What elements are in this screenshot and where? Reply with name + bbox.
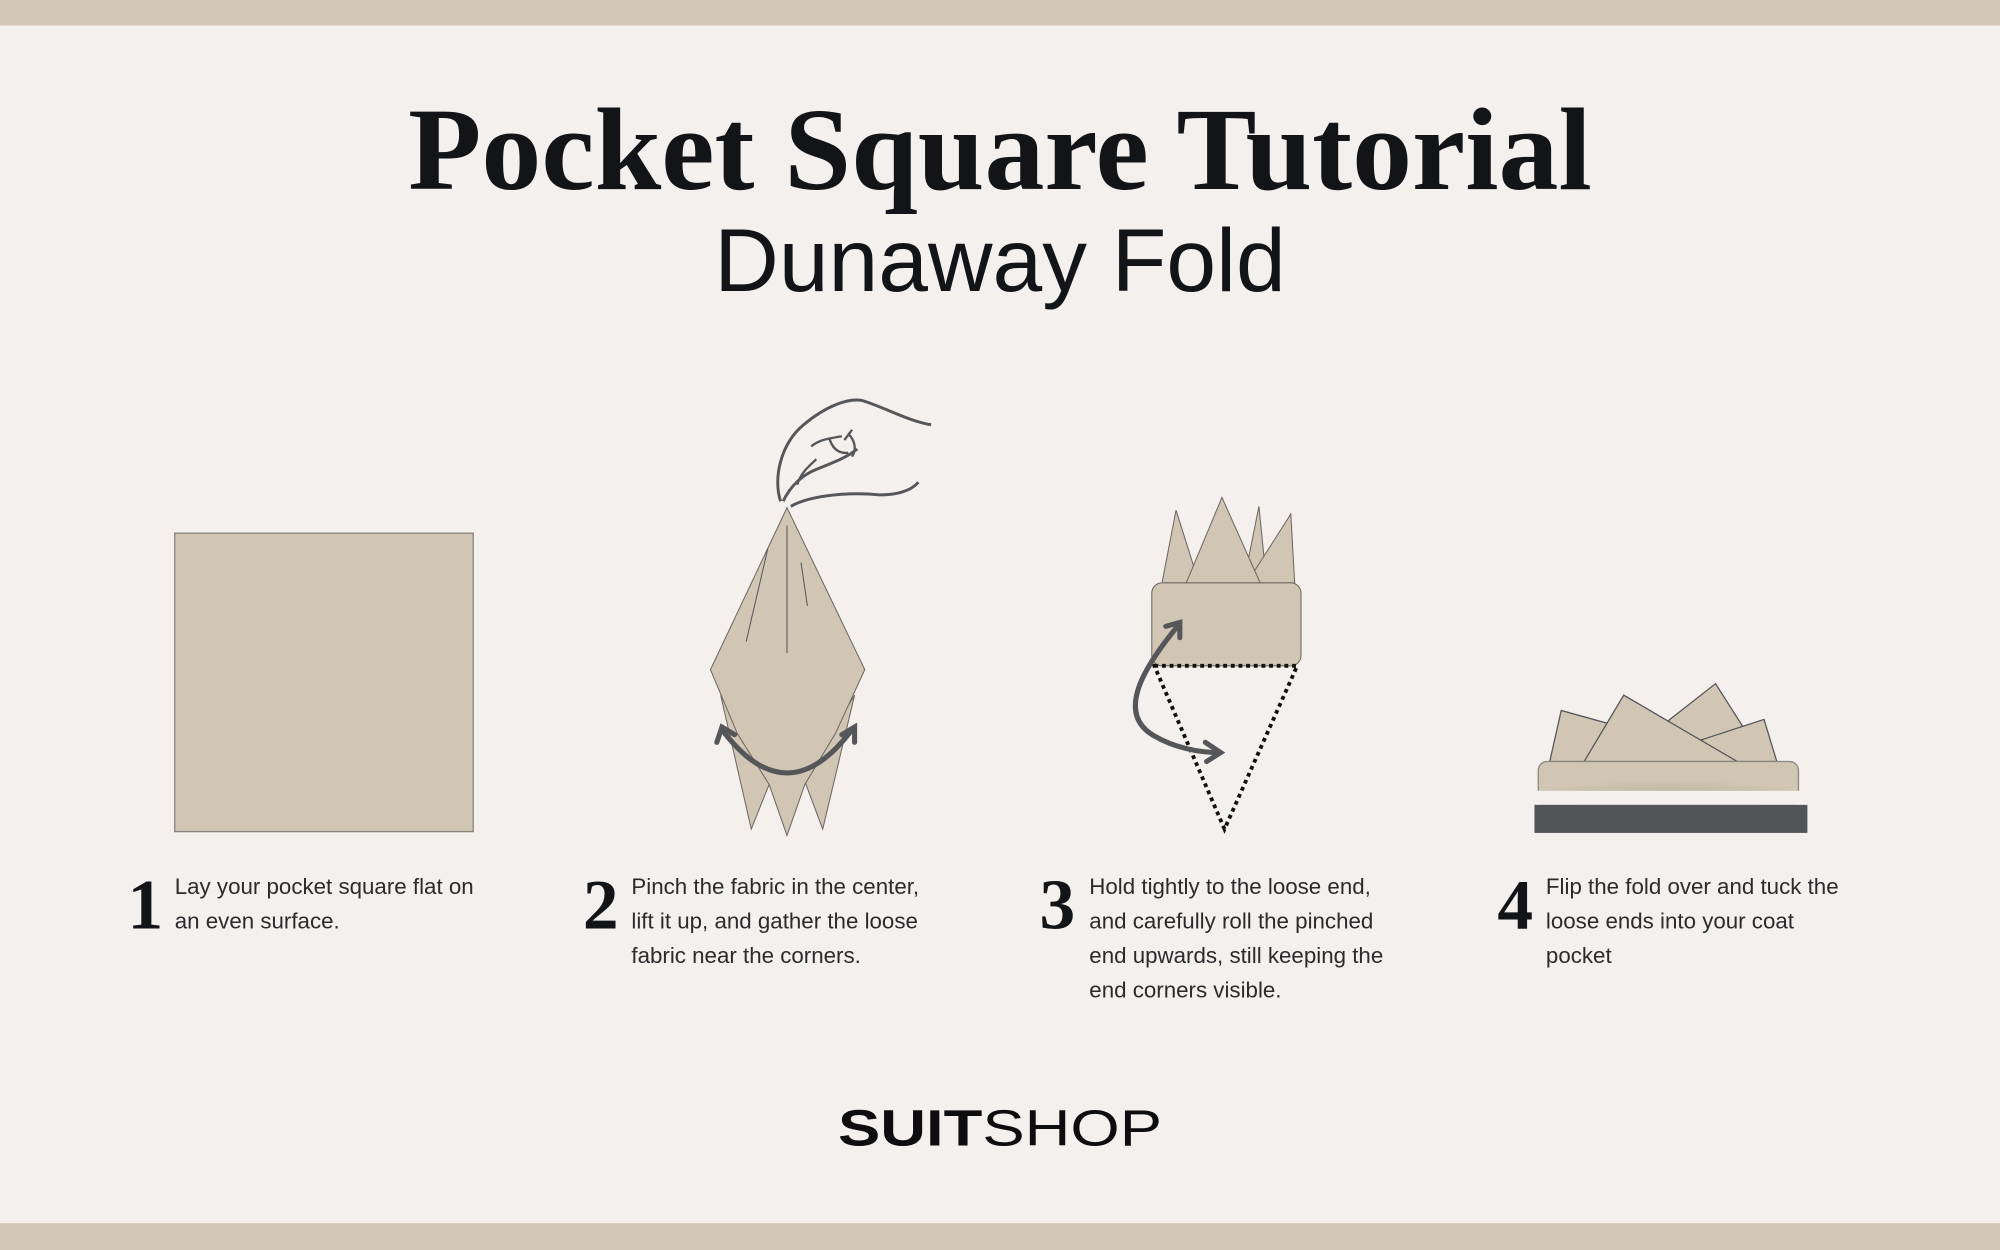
- step 2 text: lift it up, and gather the loose: [631, 909, 918, 934]
- step 4 text: Flip the fold over and tuck the: [1546, 874, 1839, 899]
- step 4 text: [1497, 866, 1839, 968]
- step 3 text: and carefully roll the pinched: [1089, 909, 1373, 934]
- step 2 text: [583, 866, 919, 968]
- step 3 text: [1040, 866, 1383, 1002]
- arrow: roll upwards: [1135, 625, 1218, 753]
- step 1 text: [128, 866, 474, 945]
- icon: step 2 pinched fabric with hand: [710, 400, 931, 835]
- step 2 text: Pinch the fabric in the center,: [631, 874, 919, 899]
- step 1 text: 1: [128, 866, 163, 945]
- step 3 text: end upwards, still keeping the: [1089, 943, 1383, 968]
- step 2 text: fabric near the corners.: [631, 943, 861, 968]
- step 2 text: 2: [583, 866, 619, 945]
- step 3 text: end corners visible.: [1089, 977, 1282, 1002]
- icon: step 4 pocket: [1534, 684, 1807, 833]
- logo: SUIT SHOP: [838, 1099, 1162, 1156]
- step 1 text: Lay your pocket square flat on: [175, 874, 474, 899]
- step 3 text: 3: [1040, 866, 1075, 945]
- icon: step 1 flat square: [175, 533, 473, 832]
- subtitle: Dunaway Fold: [714, 210, 1286, 310]
- title: Pocket Square Tutorial: [408, 85, 1592, 215]
- step 3 text: Hold tightly to the loose end,: [1089, 874, 1371, 899]
- step 4 text: pocket: [1546, 943, 1612, 968]
- icon: step 3 rolled fold: [1135, 497, 1301, 829]
- arrow: gather corners: [722, 730, 852, 773]
- step 1 text: an even surface.: [175, 909, 340, 934]
- step 4 text: loose ends into your coat: [1546, 909, 1795, 934]
- step 4 text: 4: [1497, 866, 1533, 945]
